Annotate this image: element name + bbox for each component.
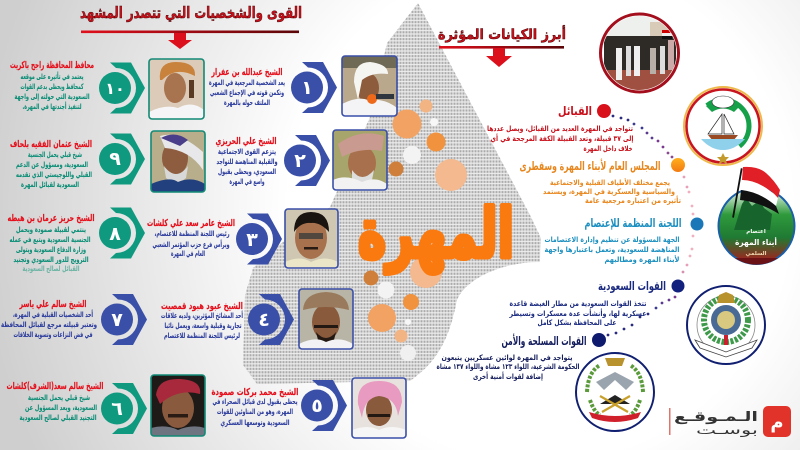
heading: key entities: أبرز الكيانات المؤثرة	[438, 25, 566, 43]
entity: general council: تأثيره من اعتباره مرجعية عامة	[585, 195, 681, 205]
badge 1: ١	[301, 77, 313, 99]
badge 10	[99, 62, 145, 114]
badge 8	[99, 208, 145, 258]
text: figure 1: وتكمن قوته في الإجماع الشعبي	[210, 88, 284, 97]
text: figure 9: السعودية لقبائل المهرة	[21, 180, 79, 189]
badge 7	[101, 294, 147, 345]
entity: organizing committee: اللجنة المنظمة للإعتصام	[584, 216, 682, 231]
text: figure 9	[10, 139, 92, 189]
photo 4	[299, 289, 353, 349]
entity: Saudi forces: على المحافظة بشكل كامل	[538, 318, 616, 327]
badge 5: ٥	[311, 395, 323, 417]
logo: sit-in of Mahra sons: السلمي	[745, 251, 767, 257]
photo frame 1	[342, 56, 397, 116]
entity: general council: والسياسية والعسكرية في المهرة، ويستمد	[543, 187, 675, 196]
text: figure 1: يعد الشخصية المرجعية في المهرة	[209, 78, 285, 87]
text: figure 8: الترويج للدور السعودي وتجنيد	[14, 255, 88, 264]
text: figure 2: واسع في المهرة	[230, 177, 265, 186]
entity: tribes	[487, 104, 634, 153]
photo frame 9	[151, 131, 205, 192]
text: figure 2: السعودي، ويحظى بقبول	[218, 167, 276, 176]
entity: tribes: القبائل	[558, 104, 592, 118]
text: figure 8	[8, 213, 94, 273]
entity: Saudi forces	[509, 279, 684, 327]
text: figure 2: والقبلية المناهضة للتواجد	[216, 157, 278, 166]
badge 8: ٨	[109, 223, 121, 245]
text: figure 8: الجنسية السعودية ويتبع في عمله	[10, 235, 90, 244]
text: figure 2	[216, 136, 278, 186]
entity: armed forces: القوات المسلحة والأمن	[502, 333, 586, 349]
badge 1	[291, 62, 337, 113]
logo: general council	[684, 87, 762, 165]
badge 2: ٢	[294, 150, 306, 172]
text: figure 3: ويرأس فرع حزب المؤتمر الشعبي	[152, 239, 230, 249]
photo 2	[333, 130, 387, 190]
badge 9	[99, 134, 145, 184]
text: figure 9: السعودية، ومسؤول عن الدعم	[16, 160, 88, 169]
text: figure 1	[209, 67, 285, 107]
text: figure 9: شيخ قبلي يحمل الجنسية	[28, 150, 82, 159]
text: figure 5	[212, 387, 298, 427]
entity: general council: يجمع مختلف الأطياف القبلية والاجتماعية	[550, 178, 670, 187]
photo 3	[285, 209, 338, 268]
badge 6	[101, 383, 147, 434]
text: figure 1: الشيخ عبدالله بن عفرار	[211, 67, 282, 78]
text: figure 5: السعودية وتوسعها العسكري	[220, 418, 290, 427]
text: figure 6: شيخ قبلي يحمل الجنسية	[28, 393, 90, 402]
text: figure 5: المهرة، وهو من المناوئين للقوات	[217, 407, 293, 416]
photo 1	[342, 56, 397, 116]
logo: sit-in of Mahra sons: أبناء المهرة	[735, 237, 777, 247]
badge 7: ٧	[111, 309, 123, 331]
text: figure 4: أحد المشائخ المؤثرين، ولديه علاقات	[161, 310, 243, 320]
text: figure 9: الشيخ عثمان الفقيه بلحاف	[10, 139, 92, 150]
text: figure 4	[161, 301, 243, 340]
entity: armed forces: إضافة لقوات أمنية أخرى	[473, 371, 543, 381]
photo 6	[151, 375, 205, 436]
logo: Saudi land forces	[687, 286, 765, 364]
text: figure 7: في فض النزاعات وتسوية الخلافات	[14, 330, 93, 339]
text: figure 8: ينتمي لقبيلة صمودة ويحمل	[16, 225, 86, 234]
text: figure 10: لتنفيذ أجندتها في المهرة.	[22, 101, 82, 111]
photo 10	[149, 59, 204, 119]
text: figure 10	[10, 60, 94, 111]
text: figure 8: الشيخ حريز عرمان بن هبطه	[8, 213, 94, 224]
entity: general council	[520, 158, 685, 205]
entity: organizing committee: لأبناء المهرة ومطالبهم	[604, 255, 680, 264]
text: figure 6: السعودية، ويعد المسؤول عن	[25, 403, 97, 412]
central title: Al-Mahra: المهرة	[358, 195, 514, 274]
badge 2	[284, 135, 330, 186]
entity: tribes: خلاف داخل المهرة	[584, 144, 632, 153]
entity: organizing committee	[544, 216, 704, 264]
entity: organizing committee: المناهضة للسعودية، وتعمل باعتبارها واجهة	[544, 245, 680, 254]
text: figure 6	[6, 381, 103, 422]
entity: Saudi forces: عسكرية لها، وأنشأت عدة معسكرات وتسيطر	[509, 308, 646, 318]
logo: sit-in of Mahra sons: اعتصام	[746, 229, 766, 235]
text: figure 1: الملتف حوله بالمهرة	[224, 98, 270, 107]
badge 4: ٤	[258, 309, 270, 331]
text: figure 6: التجنيد القبلي لصالح السعودية	[20, 413, 96, 422]
text: figure 7	[1, 299, 97, 339]
map of Al-Mahra	[243, 3, 541, 384]
text: figure 5: الشيخ محمد بركات صمودة	[212, 387, 298, 398]
photo frame 6	[151, 375, 205, 436]
logo: Al-Mawqea Post: الـمـوقـع	[674, 410, 758, 425]
text: figure 9: القبلي واللوجيستي الذي تقدمه	[16, 170, 92, 179]
badge 3	[236, 214, 282, 264]
text: figure 3	[147, 218, 235, 258]
image: tribes gathering	[600, 13, 680, 92]
logo: Al-Mawqea Post: م	[770, 412, 784, 433]
text: figure 2: الشيخ علي الحريزي	[216, 136, 276, 147]
badge 10: ١٠	[105, 79, 125, 98]
text: figure 7: وتعتبر قبيلته مرجع لقبائل المحافظة	[1, 320, 97, 329]
badge 3: ٣	[246, 229, 258, 251]
text: figure 2: يتزعم القوى الاجتماعية	[218, 147, 276, 156]
badge 4	[248, 294, 294, 345]
text: figure 3: الشيخ عامر سعد علي كلشات	[147, 218, 235, 229]
photo frame 5	[352, 378, 406, 438]
photo frame 4	[299, 289, 353, 349]
dotted arc	[607, 115, 694, 336]
text: figure 4: لرئيس اللجنة المنظمة للاعتصام	[164, 331, 240, 340]
text: figure 8: وزارة الدفاع السعودية ويتولى	[16, 245, 86, 254]
text: figure 10: السعودية التي حولته إلى واجهة	[14, 92, 90, 101]
heading: key entities	[438, 25, 566, 67]
logo: sit-in of Mahra sons	[718, 167, 794, 265]
entity: tribes: تتواجد في المهرة العديد من القبائل، ويصل عددها	[487, 124, 633, 133]
entity: organizing committee: الجهة المسؤولة عن تنظيم وإدارة الاعتصامات	[544, 235, 680, 244]
entity: tribes: إلى ٣٧ قبيلة، وتعد القبيلة الكفة المرجحة في أي	[490, 133, 634, 143]
text: figure 4: الشيخ عبود هبود قمصيت	[161, 301, 243, 312]
photo frame 2	[333, 130, 387, 190]
decorative bubbles	[364, 100, 467, 361]
text: figure 6: الشيخ سالم سعد(الشرف)كلشات	[6, 381, 103, 392]
logo: Al-Mawqea Post: بوسـت	[696, 423, 758, 438]
logo: Yemeni armed forces	[576, 353, 654, 431]
text: figure 3: رئيس اللجنة المنظمة للاعتصام،	[154, 229, 230, 238]
entity: Saudi forces: القوات السعودية	[598, 279, 666, 294]
text: figure 4: تجارية وقبلية واسعة، ويعمل نائبا	[164, 321, 242, 330]
text: figure 8: القبائل لصالح السعودية	[22, 264, 80, 273]
photo 9	[151, 131, 205, 192]
text: figure 10: محافظ المحافظة راجح باكريت	[10, 60, 94, 71]
badge 9: ٩	[109, 148, 121, 170]
badge 6: ٦	[111, 398, 123, 420]
text: figure 10: كمحافظ ويحظى بدعم القوات	[20, 82, 84, 91]
photo frame 10	[149, 59, 204, 119]
text: figure 7: الشيخ سالم علي ياسر	[19, 299, 87, 310]
text: figure 10: يعتمد في تأثيره على موقعه	[20, 71, 84, 81]
entity: general council: المجلس العام لأبناء المهرة وسقطرى	[520, 158, 660, 174]
badge 5	[301, 380, 347, 431]
text: figure 7: أحد الشخصيات القبلية في المهرة،	[13, 309, 93, 319]
photo 5	[352, 378, 406, 430]
heading: forces and figures: القوى والشخصيات التي تتصدر المشهد	[80, 4, 302, 23]
entity: armed forces: يتواجد في المهرة لوائين عسكريين يتبعون	[442, 353, 573, 362]
entity: Saudi forces: تتخذ القوات السعودية من مطار الغيضة قاعدة	[510, 299, 647, 308]
logo: Al-Mawqea Post	[669, 406, 791, 438]
text: figure 5: يحظى بقبول لدى قبائل الصحراء في	[212, 397, 298, 406]
text: figure 3: العام في المهرة	[171, 249, 205, 258]
heading: forces and figures	[80, 4, 302, 49]
photo frame 3	[285, 209, 338, 268]
entity: armed forces: الحكومة الشرعية، اللواء ١٢٣ مشاة واللواء ١٣٧ مشاة	[437, 362, 580, 371]
entity: armed forces	[437, 333, 606, 381]
